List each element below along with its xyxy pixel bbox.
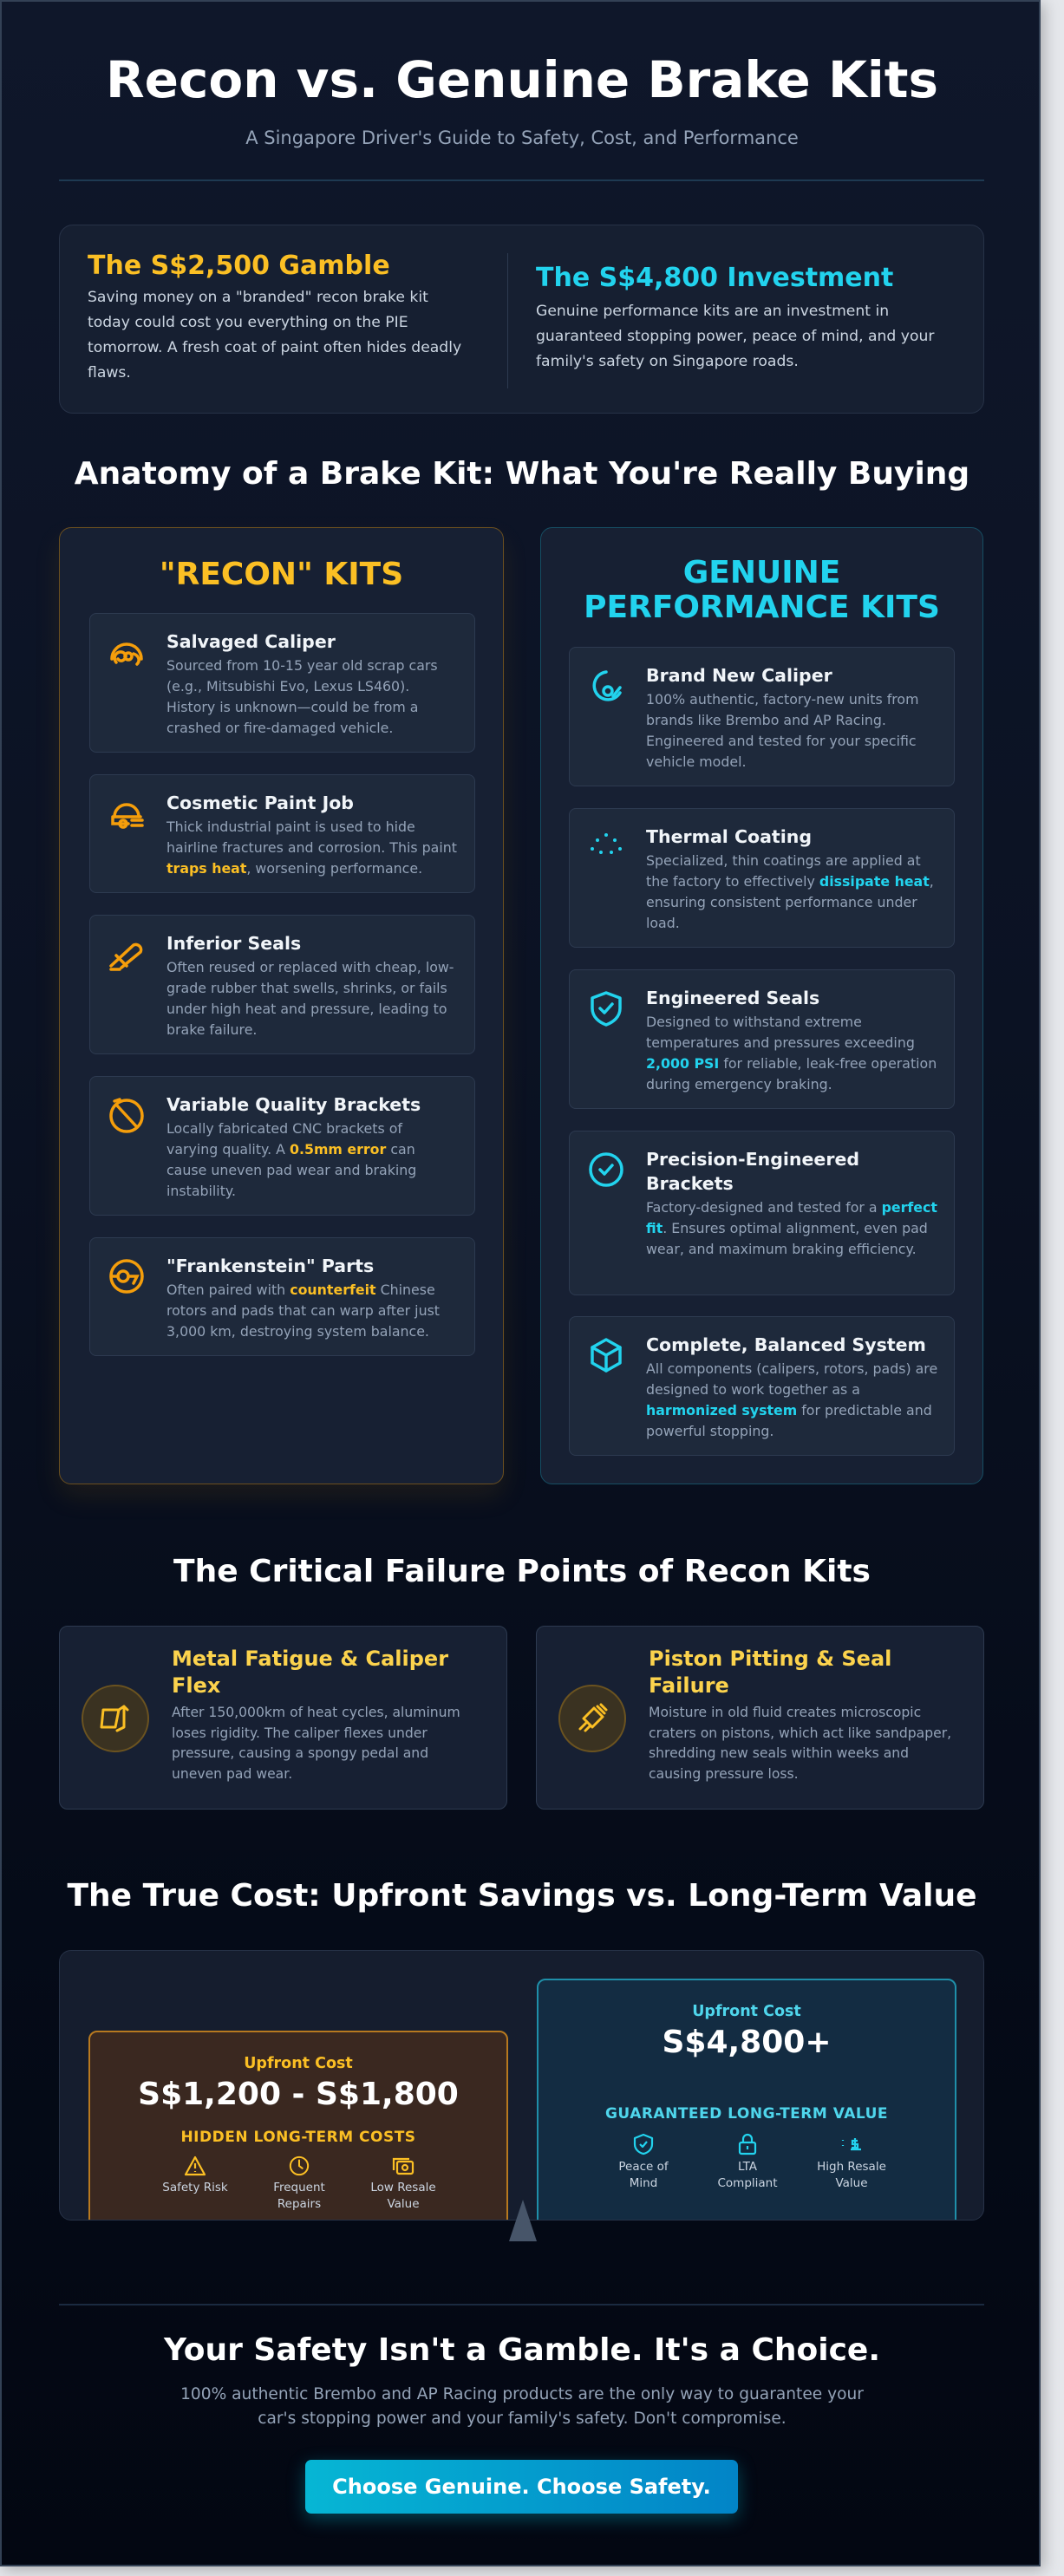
item: brackets: Locally fabricated CNC brackets of varying quality. A 0.5mm error can cause uneven pad wear and braking instability.	[166, 1120, 416, 1199]
item: engineered seals: Engineered Seals	[646, 988, 819, 1008]
item: frankenstein parts	[89, 1237, 475, 1356]
item: precision brackets: Precision-Engineered	[646, 1149, 859, 1170]
item: balanced system	[569, 1316, 955, 1456]
panel: recon kits	[59, 527, 504, 1484]
text: piston pitting: Moisture in old fluid creates microscopic craters on pistons, which act like sandpaper, shredding new seals within weeks and causing pressure loss.	[649, 1705, 951, 1781]
icon: peace of mind	[618, 2133, 669, 2190]
intro right: investment: Genuine performance kits are an investment in guaranteed stopping power, peace of mind, and your family's safety on Singapore roads.	[536, 303, 934, 370]
intro left: gamble: today could cost you everything on the PIE	[88, 314, 408, 331]
intro right: investment: The S$4,800 Investment	[536, 263, 893, 293]
intro left: gamble	[88, 251, 461, 382]
card: metal fatigue	[59, 1626, 507, 1810]
heading: safety choice: Your Safety Isn't a Gamble. It's a Choice.	[164, 2332, 880, 2368]
item: brand new caliper: Brand New Caliper	[646, 665, 832, 686]
item: thermal coating: Thermal Coating	[646, 826, 812, 847]
heading: failure points: The Critical Failure Points of Recon Kits	[173, 1554, 871, 1589]
item: frankenstein parts: Often paired with counterfeit Chinese rotors and pads that can warp after just 3,000 km, destroying system balance.	[166, 1281, 440, 1340]
item: salvaged caliper	[89, 613, 475, 753]
genuine heading	[584, 555, 940, 625]
panel: cost comparison	[59, 1950, 984, 2221]
text: closing paragraph: 100% authentic Brembo and AP Racing products are the only way to guarantee your	[180, 2385, 864, 2403]
intro left: gamble: tomorrow. A fresh coat of paint often hides deadly	[88, 339, 461, 356]
arrow: scale pointer	[509, 2201, 537, 2241]
icon: low resale	[370, 2157, 436, 2211]
item: brand new caliper	[569, 647, 955, 786]
icon: low resale: Low Resale	[370, 2181, 436, 2194]
item: inferior seals: Inferior Seals	[166, 933, 301, 954]
item: paint job: Thick industrial paint is used to hide hairline fractures and corrosion. This paint traps heat, worsening performance.	[166, 818, 457, 877]
genuine cost card	[537, 1979, 956, 2239]
icon: brush	[558, 1685, 626, 1752]
heading: true cost: The True Cost: Upfront Savings vs. Long-Term Value	[67, 1878, 977, 1914]
intro left: gamble: flaws.	[88, 364, 131, 382]
intro left: gamble: The S$2,500 Gamble	[88, 251, 390, 281]
item: frankenstein parts: "Frankenstein" Parts	[166, 1255, 374, 1276]
item: precision brackets: Factory-designed and tested for a perfect fit. Ensures optimal alignment, even pad wear, and maximum braking efficiency.	[646, 1199, 937, 1257]
text: piston pitting	[649, 1647, 951, 1781]
icon: high resale	[817, 2138, 886, 2190]
icon: repairs: Repairs	[277, 2197, 321, 2211]
item: thermal coating	[569, 808, 955, 948]
recon cost card: HIDDEN LONG-TERM COSTS	[180, 2129, 416, 2146]
icon: safety risk: Safety Risk	[162, 2181, 228, 2194]
heading: anatomy: Anatomy of a Brake Kit: What You're Really Buying	[75, 456, 969, 492]
icon: low resale: Value	[387, 2197, 420, 2211]
icon: peace of mind: Mind	[630, 2176, 657, 2190]
icon: LTA compliant: Compliant	[717, 2176, 778, 2190]
text: metal fatigue: After 150,000km of heat cycles, aluminum loses rigidity. The caliper flexes under pressure, causing a spongy pedal and uneven pad wear.	[172, 1705, 460, 1781]
card: piston pitting	[536, 1626, 984, 1810]
text: metal fatigue	[172, 1647, 460, 1781]
title: Recon vs. Genuine Brake Kits	[106, 50, 938, 109]
subtitle: A Singapore Driver's Guide to Safety, Cost, and Performance	[245, 127, 799, 148]
icon: repairs	[273, 2155, 325, 2211]
recon cost card: S$1,200 - S$1,800	[138, 2077, 459, 2112]
recon cost card	[88, 2031, 508, 2239]
icon: peace of mind: Peace of	[618, 2160, 669, 2174]
intro left: gamble: Saving money on a "branded" recon brake kit	[88, 289, 428, 306]
intro right: investment	[536, 263, 935, 370]
item: brackets: Variable Quality Brackets	[166, 1094, 421, 1115]
icon: high resale: Value	[835, 2176, 868, 2190]
genuine cost card: S$4,800+	[662, 2025, 831, 2060]
item: salvaged caliper: Sourced from 10-15 year old scrap cars (e.g., Mitsubishi Evo, Lexus LS460). History is unknown—could be from a crashed or fire-damaged vehicle.	[166, 657, 438, 736]
item: inferior seals	[89, 915, 475, 1054]
genuine heading: GENUINE	[683, 555, 840, 590]
icon: high resale: High Resale	[817, 2160, 886, 2174]
text: closing paragraph	[180, 2385, 864, 2428]
icon: LTA compliant: LTA	[738, 2160, 757, 2174]
text: closing paragraph: car's stopping power and your family's safety. Don't compromise.	[258, 2410, 787, 2428]
panel: intro	[59, 225, 984, 414]
genuine cost card: GUARANTEED LONG-TERM VALUE	[605, 2105, 888, 2123]
text: metal fatigue: Metal Fatigue & Caliper Flex	[172, 1647, 448, 1698]
panel: genuine kits	[540, 527, 983, 1484]
text: piston pitting: Piston Pitting & Seal Failure	[649, 1647, 891, 1698]
icon: caliper flex	[82, 1685, 149, 1752]
item: paint job: Cosmetic Paint Job	[166, 792, 354, 813]
item: inferior seals: Often reused or replaced with cheap, low-grade rubber that swells, shrinks, or fails under high heat and pressure, leading to brake failure.	[166, 959, 454, 1038]
item: thermal coating: Specialized, thin coatings are applied at the factory to effectively dissipate heat, ensuring consistent performance under load.	[646, 852, 934, 931]
genuine heading: PERFORMANCE KITS	[584, 590, 940, 625]
item: balanced system: Complete, Balanced System	[646, 1334, 926, 1355]
button: CTA	[305, 2460, 738, 2514]
icon: repairs: Frequent	[273, 2181, 325, 2194]
item: precision brackets	[569, 1131, 955, 1295]
item: engineered seals	[569, 969, 955, 1109]
item: salvaged caliper: Salvaged Caliper	[166, 631, 336, 652]
item: precision brackets: Brackets	[646, 1173, 734, 1194]
recon cost card: Upfront Cost	[244, 2055, 353, 2072]
item: brand new caliper: 100% authentic, factory-new units from brands like Brembo and AP Racing. Engineered and tested for your specific vehicle model.	[646, 691, 918, 770]
item: paint job	[89, 774, 475, 893]
icon: safety risk	[162, 2155, 228, 2194]
item: engineered seals: Designed to withstand extreme temperatures and pressures exceeding 2,000 PSI for reliable, leak-free operation during emergency braking.	[646, 1014, 937, 1092]
genuine cost card: Upfront Cost	[692, 2003, 801, 2020]
item: balanced system: All components (calipers, rotors, pads) are designed to work together as a harmonized system for predictable and powerful stopping.	[646, 1360, 937, 1439]
button: CTA: Choose Genuine. Choose Safety.	[332, 2475, 711, 2499]
recon heading: "RECON" KITS	[160, 557, 403, 592]
item: brackets	[89, 1076, 475, 1216]
icon: LTA compliant	[717, 2133, 778, 2190]
